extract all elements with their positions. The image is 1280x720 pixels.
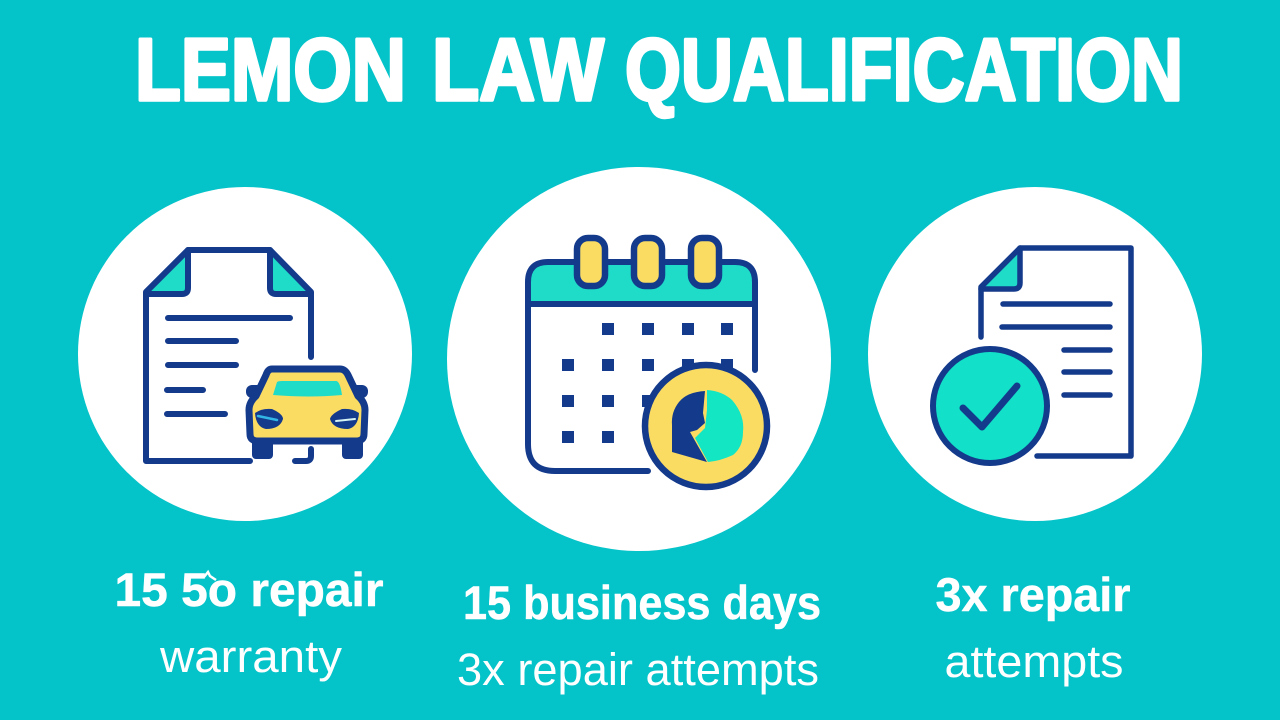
icon: check badge <box>933 349 1047 463</box>
panel: business days <box>447 167 831 695</box>
icon: document with check <box>933 248 1131 463</box>
panel: repair attempts <box>868 187 1202 687</box>
label: business days heading: 15 business days <box>463 576 821 629</box>
title: LEMON <box>135 20 406 119</box>
icon: car <box>246 369 368 459</box>
label: business days subtext: 3x repair attempts <box>457 644 819 695</box>
icon: clock badge <box>645 365 767 487</box>
circle: calendar background <box>447 167 831 551</box>
decorative glitch mark above the digits <box>204 572 216 580</box>
label: warranty subtext: warranty <box>159 631 343 682</box>
icon: calendar with clock <box>528 238 767 487</box>
circle: document background <box>868 187 1202 521</box>
title: LAW <box>432 20 604 119</box>
label: warranty heading: 15 5o repair <box>114 563 384 616</box>
icon: document with car <box>146 250 368 461</box>
title <box>135 20 1183 119</box>
icon: calendar day grid <box>562 323 733 443</box>
circle: warranty background <box>78 187 412 521</box>
panel: warranty <box>78 187 412 682</box>
icon: calendar rings <box>577 238 719 286</box>
label: repair subtext: attempts <box>944 636 1124 687</box>
label: repair heading: 3x repair <box>936 568 1130 621</box>
